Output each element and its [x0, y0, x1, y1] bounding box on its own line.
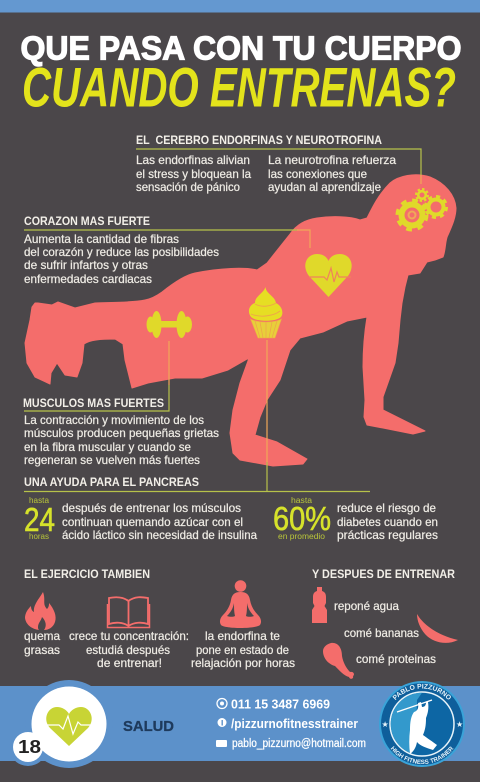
section: pancreas: hasta	[29, 496, 50, 505]
contact info: pablo_pizzurno@hotmail.com	[232, 738, 366, 750]
icon: flame	[25, 592, 56, 630]
text: concentracion: estudiá después	[86, 643, 170, 657]
section: pancreas: 60%	[273, 500, 331, 537]
section: cerebro: Las endorfinas alivian	[136, 153, 250, 167]
section: pancreas: prácticas regulares	[337, 528, 438, 542]
icon: water bottle	[312, 587, 327, 623]
section: pancreas: horas	[29, 532, 49, 541]
section: pancreas: ácido láctico sin necesidad de insulina	[62, 528, 257, 542]
section: y despues de entrenar	[312, 569, 458, 679]
section: pancreas: reduce el riesgo de	[337, 501, 436, 515]
icon: facebook	[218, 718, 226, 727]
logo stars: ★	[382, 720, 389, 729]
section: cerebro: ayudan al aprendizaje	[268, 180, 381, 194]
section: pancreas	[24, 477, 438, 542]
top blue band	[0, 0, 480, 12]
section: cerebro: sensación de pánico	[136, 180, 240, 194]
title: QUE PASA CON TU CUERPO	[20, 30, 462, 68]
icon: envelope	[216, 740, 227, 747]
icon: brain gears	[398, 189, 446, 230]
icon: dumbbell	[146, 311, 192, 338]
section: y despues de entrenar: reponé agua	[334, 599, 399, 613]
text: endorfina	[191, 629, 295, 670]
text: concentracion: crece tu concentración:	[69, 629, 189, 643]
icon: cupcake	[249, 287, 282, 338]
section: musculos: regeneran se vuelven más fuertes	[24, 453, 200, 467]
text: endorfina: pone en estado de	[196, 643, 289, 657]
logo ring text: HIGH FITNESS TRAINER	[390, 746, 454, 764]
icon: heart	[305, 254, 352, 297]
text: concentracion: de entrenar!	[97, 656, 162, 670]
badge: health heart	[9, 680, 113, 768]
logo stars: ★	[456, 720, 463, 729]
section: y despues de entrenar: Y DESPUES DE ENTRENAR	[312, 569, 456, 581]
section: pancreas: continuan quemando azúcar con el	[62, 515, 243, 529]
icon: open book	[108, 597, 150, 628]
section: musculos: La contracción y movimiento de los	[24, 413, 204, 427]
section: pancreas: UNA AYUDA PARA EL PANCREAS	[24, 477, 199, 489]
section: cerebro: EL CEREBRO ENDORFINAS Y NEUROTROFINA	[136, 135, 382, 147]
section: musculos: en la fibra muscular y cuando se	[24, 440, 191, 454]
section: cerebro	[136, 135, 396, 194]
contact info	[216, 698, 366, 750]
section: pancreas: hasta	[291, 496, 313, 505]
section: corazon: CORAZON MAS FUERTE	[24, 216, 150, 228]
text: quema grasas: grasas	[24, 643, 60, 657]
section: pancreas: 24	[24, 501, 55, 538]
text: quema grasas	[24, 629, 60, 657]
text: quema grasas: quema	[24, 629, 60, 643]
section: pancreas: después de entrenar los músculos	[62, 501, 241, 515]
logo ring text: PABLO PIZZURNO	[392, 684, 451, 700]
footer band	[0, 686, 480, 761]
section: y despues de entrenar: comé proteinas	[356, 652, 436, 666]
icon: whatsapp	[217, 698, 227, 708]
body silhouette doing a push-up	[25, 175, 456, 466]
section: y despues de entrenar: comé bananas	[344, 626, 419, 640]
section: pancreas: en promedio	[278, 532, 326, 541]
contact info: 011 15 3487 6969	[231, 698, 330, 712]
section: corazon: del corazón y reduce las posibilidades	[24, 245, 219, 259]
section: musculos: músculos producen pequeñas grietas	[24, 426, 219, 440]
section: cerebro: La neurotrofina refuerza	[268, 153, 396, 167]
section: pancreas: diabetes cuando en	[337, 515, 438, 529]
section: cerebro: las conexiones que	[268, 167, 367, 181]
contact info: /pizzurnofitnesstrainer	[231, 717, 358, 731]
section: corazon	[24, 216, 219, 286]
label: salud: SALUD	[123, 718, 174, 735]
text: endorfina: relajación por horas	[191, 656, 295, 670]
icon: meditating figure	[220, 580, 261, 628]
title	[20, 30, 462, 118]
section: musculos	[23, 398, 219, 467]
section: corazon: Aumenta la cantidad de fibras	[24, 232, 179, 246]
section: el ejercicio tambien: EL EJERCICIO TAMBIEN	[24, 569, 150, 581]
logo: Pablo Pizzurno high fitness trainer	[379, 681, 465, 767]
logo stars	[382, 720, 463, 729]
icon: banana	[417, 614, 458, 643]
text: concentracion	[69, 629, 189, 670]
badge: health heart: 18	[18, 737, 41, 757]
section: musculos: MUSCULOS MAS FUERTES	[23, 398, 164, 410]
connector lines	[24, 149, 421, 492]
text: endorfina: la endorfina te	[205, 629, 280, 643]
section: el ejercicio tambien	[24, 569, 295, 670]
section: corazon: de sufrir infartos y otras	[24, 258, 148, 272]
section: corazon: enfermedades cardiacas	[24, 272, 152, 286]
logo ring text	[390, 684, 454, 764]
section: cerebro: el stress y bloquean la	[136, 167, 251, 181]
icon: chicken drumstick	[323, 643, 354, 679]
